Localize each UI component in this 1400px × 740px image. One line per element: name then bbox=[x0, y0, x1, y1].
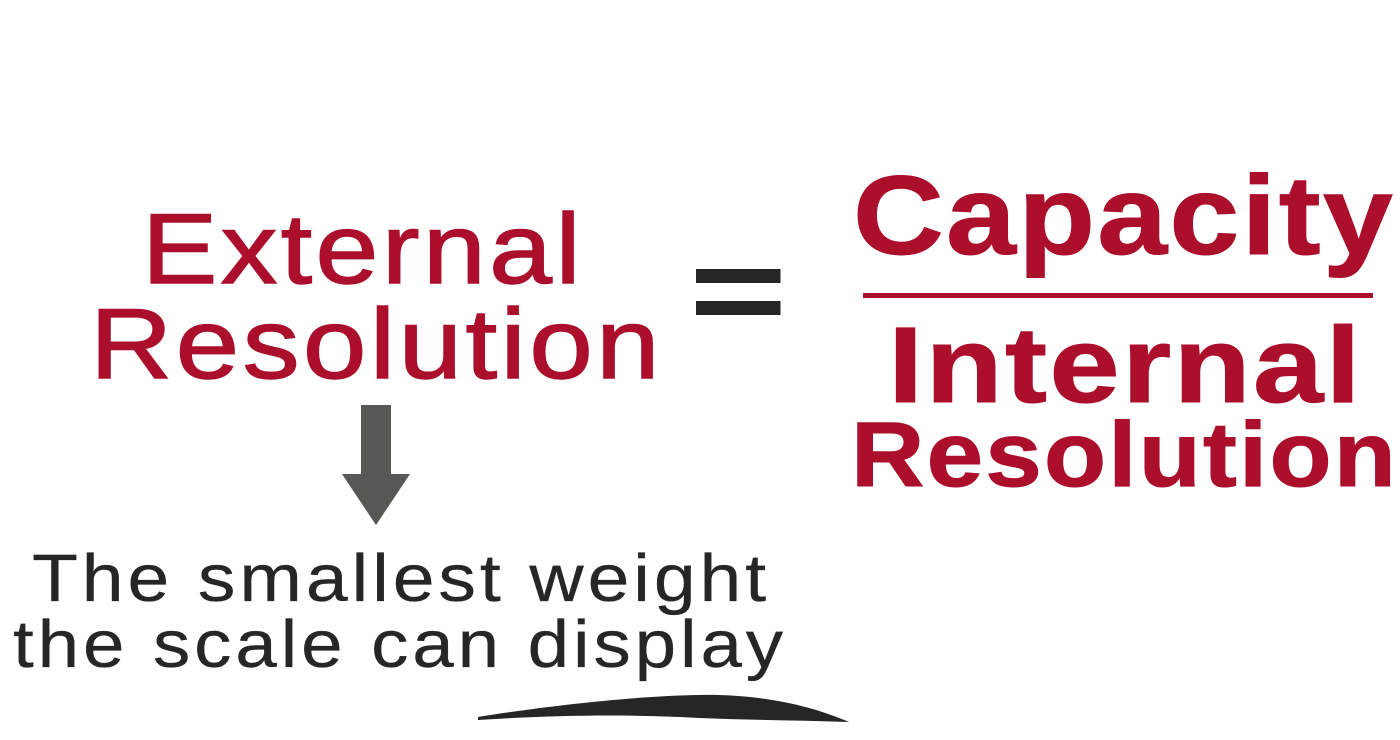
text: definition of external resolution: the scale can display bbox=[13, 607, 787, 682]
heading: External Resolution: External bbox=[142, 193, 584, 304]
decoration: brush swoosh bbox=[478, 695, 849, 722]
denominator: Internal Resolution bbox=[851, 304, 1398, 506]
icon: equals sign bbox=[696, 269, 780, 315]
denominator: Internal Resolution: Resolution bbox=[851, 404, 1398, 506]
heading: External Resolution: Resolution bbox=[90, 288, 663, 399]
fraction bar bbox=[863, 293, 1373, 298]
heading: External Resolution bbox=[90, 193, 663, 399]
formula: capacity over internal resolution bbox=[851, 153, 1398, 506]
text: definition of external resolution: The smallest weight bbox=[32, 541, 770, 616]
numerator: Capacity: Capacity bbox=[853, 153, 1395, 278]
denominator: Internal Resolution: Internal bbox=[888, 304, 1363, 425]
text: definition of external resolution bbox=[13, 541, 787, 682]
arrow: pointing down to definition bbox=[342, 405, 410, 525]
